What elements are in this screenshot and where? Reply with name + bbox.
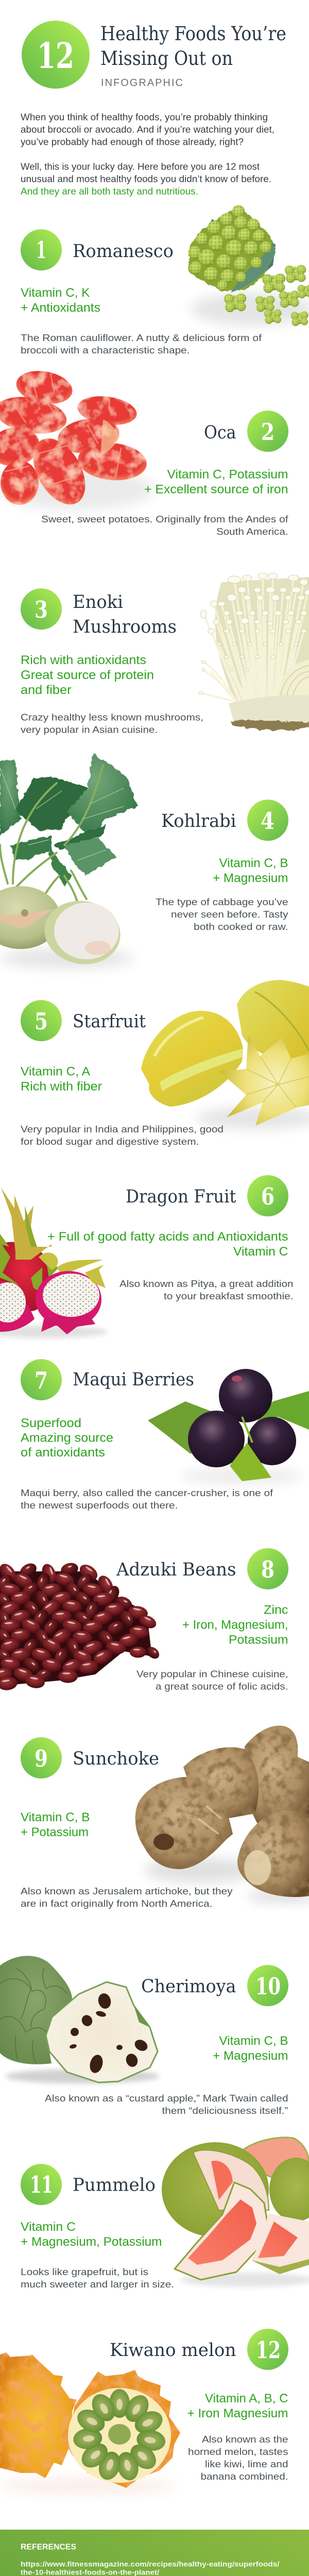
panel: Adzuki Beans <box>0 1548 288 1692</box>
description: Looks like grapefruit, but is <box>21 2267 148 2277</box>
photo: dragon fruit <box>0 1188 108 1338</box>
number badge: 10 <box>255 1973 281 2000</box>
description: the newest superfoods out there. <box>21 1500 178 1511</box>
intro text: you’ve probably had enough of those already, right? <box>21 137 244 147</box>
description <box>41 514 289 537</box>
description: to your breakfast smoothie. <box>164 1291 294 1301</box>
header <box>21 21 286 197</box>
description: banana combined. <box>201 2471 288 2482</box>
photo: oca tubers <box>0 367 154 514</box>
description: Very popular in Chinese cuisine, <box>136 1669 288 1680</box>
nutrients: Vitamin C, K <box>21 286 90 300</box>
nutrients: Rich with fiber <box>21 1080 102 1093</box>
number badge <box>21 229 62 270</box>
nutrients: Amazing source <box>21 1431 113 1445</box>
nutrients: Vitamin C, A <box>21 1064 90 1079</box>
nutrients: Vitamin A, B, C <box>205 2392 288 2405</box>
photo: kiwano melon <box>0 2352 180 2494</box>
number badge: 9 <box>35 1745 48 1772</box>
number badge <box>247 1175 288 1216</box>
heading: Starfruit <box>73 1011 146 1032</box>
panel: Kiwano melon <box>0 2329 288 2494</box>
number badge: 11 <box>30 2171 53 2198</box>
number badge: 2 <box>261 418 274 446</box>
panel: Sunchoke <box>21 1725 309 1909</box>
description: like kiwi, lime and <box>205 2459 288 2469</box>
title: Healthy Foods You’re <box>100 23 286 45</box>
intro text: And they are all both tasty and nutritious. <box>21 187 198 197</box>
nutrients: Rich with antioxidants <box>21 653 146 667</box>
nutrients: Vitamin C, Potassium <box>167 468 288 481</box>
description: are in fact originally from North America. <box>21 1899 212 1909</box>
nutrients: Vitamin C, B <box>219 2034 288 2048</box>
nutrients <box>213 856 288 885</box>
description <box>45 2093 288 2116</box>
description: horned melon, tastes <box>188 2447 288 2457</box>
photo: romanesco <box>188 205 309 326</box>
nutrients: and fiber <box>21 683 71 697</box>
heading: Mushrooms <box>73 617 177 637</box>
number badge <box>247 1548 288 1589</box>
description <box>21 712 203 735</box>
number badge <box>21 588 62 630</box>
intro text: unusual and most healthy foods you didn’t know of before. <box>21 174 271 184</box>
description: Very popular in India and Philippines, good <box>21 1124 224 1134</box>
heading: Dragon Fruit <box>126 1187 236 1207</box>
heading: Kiwano melon <box>110 2340 236 2361</box>
nutrients <box>213 2034 288 2063</box>
nutrients <box>21 1064 102 1093</box>
nutrients <box>182 1603 288 1647</box>
photo: adzuki beans <box>0 1561 162 1691</box>
nutrients: Vitamin C, B <box>219 856 288 870</box>
number badge: 8 <box>261 1556 274 1583</box>
description <box>21 1488 273 1511</box>
number badge <box>15 1350 67 1400</box>
nutrients: + Magnesium, Potassium <box>21 2235 162 2249</box>
nutrients: + Iron Magnesium <box>187 2406 288 2420</box>
number badge <box>21 2164 62 2205</box>
nutrients <box>144 468 288 497</box>
description: Also known as Pitya, a great addition <box>119 1279 294 1289</box>
description: South America. <box>216 527 288 537</box>
references heading: REFERENCES <box>21 2543 76 2551</box>
description: for blood sugar and digestive system. <box>21 1137 199 1147</box>
nutrients <box>21 1810 90 1839</box>
number badge: 12 <box>256 2336 281 2364</box>
panel: Romanesco <box>21 205 309 355</box>
number badge <box>21 1737 62 1778</box>
photo: enoki mushrooms <box>199 573 309 731</box>
heading: Cherimoya <box>141 1976 236 1997</box>
nutrients: Great source of protein <box>21 668 154 682</box>
heading: Pummelo <box>73 2175 156 2196</box>
nutrients <box>21 653 154 697</box>
number badge: 5 <box>35 1008 48 1035</box>
nutrients <box>187 2392 288 2420</box>
description: a great source of folic acids. <box>156 1682 288 1692</box>
heading: Sunchoke <box>73 1749 159 1769</box>
nutrients: + Magnesium <box>213 2049 288 2063</box>
panel: Cherimoya <box>0 1956 288 2116</box>
panel: Enoki Mushrooms <box>21 573 309 735</box>
description <box>156 897 288 932</box>
nutrients: + Antioxidants <box>21 301 100 315</box>
heading: Romanesco <box>73 241 174 262</box>
photo: maqui berries <box>148 1369 309 1484</box>
nutrients <box>21 1416 113 1460</box>
description: Sweet, sweet potatoes. Originally from the Andes of <box>41 514 289 524</box>
heading: Oca <box>204 422 236 443</box>
intro text: Well, this is your lucky day. Here before you are 12 most <box>21 162 260 172</box>
references list <box>21 2561 285 2576</box>
description: Also known as a “custard apple,” Mark Twain called <box>45 2093 288 2104</box>
heading: Adzuki Beans <box>116 1560 236 1580</box>
number badge <box>247 411 288 452</box>
description <box>21 2267 174 2290</box>
nutrients <box>47 1230 288 1259</box>
nutrients: + Iron, Magnesium, <box>182 1618 288 1632</box>
nutrients: Vitamin C <box>233 1245 288 1259</box>
description <box>21 333 262 355</box>
nutrients: Vitamin C <box>21 2220 76 2234</box>
panel: Starfruit <box>21 980 309 1147</box>
description: broccoli with a characteristic shape. <box>21 345 190 355</box>
panel: Dragon Fruit <box>0 1175 294 1338</box>
panel: Pummelo <box>21 2138 309 2290</box>
description <box>119 1279 294 1301</box>
intro text <box>21 112 274 197</box>
description: The Roman cauliflower. A nutty & delicious form of <box>21 333 262 343</box>
title <box>100 23 286 70</box>
number badge: 1 <box>36 236 46 264</box>
description: Crazy healthy less known mushrooms, <box>21 712 203 722</box>
nutrients: + Potassium <box>21 1825 89 1839</box>
nutrients: Vitamin C, B <box>21 1810 90 1824</box>
panel: Kohlrabi <box>0 753 288 970</box>
nutrients: Superfood <box>21 1416 81 1430</box>
intro text: When you think of healthy foods, you’re probably thinking <box>21 112 268 123</box>
nutrients: + Full of good fatty acids and Antioxidants <box>47 1230 288 1244</box>
nutrients: Potassium <box>229 1633 288 1647</box>
description: both cooked or raw. <box>194 922 288 932</box>
number badge <box>247 1965 288 2006</box>
description: them “deliciousness itself.” <box>162 2106 288 2116</box>
heading: Kohlrabi <box>161 811 236 832</box>
description: The type of cabbage you’ve <box>156 897 288 907</box>
big badge: 12 <box>22 21 90 89</box>
description <box>136 1669 288 1692</box>
photo: pummelo <box>162 2138 309 2287</box>
nutrients: + Excellent source of iron <box>144 482 288 497</box>
number badge <box>21 1000 62 1041</box>
description: Also known as Jerusalem artichoke, but they <box>21 1886 233 1896</box>
description: Also known as the <box>202 2434 288 2445</box>
number badge <box>247 2329 288 2370</box>
panel: references <box>0 2530 309 2576</box>
description: very popular in Asian cuisine. <box>21 724 158 735</box>
panel: Oca <box>0 367 289 537</box>
description: Maqui berry, also called the cancer-crusher, is one of <box>21 1488 273 1498</box>
heading: Enoki <box>73 592 123 613</box>
nutrients: Zinc <box>264 1603 288 1617</box>
photo: sunchoke <box>135 1725 309 1903</box>
photo: starfruit <box>141 980 309 1129</box>
number badge: 4 <box>261 807 274 835</box>
panel: Maqui Berries <box>15 1350 309 1511</box>
heading <box>73 592 177 637</box>
photo: kohlrabi <box>0 753 138 970</box>
nutrients: of antioxidants <box>21 1446 105 1460</box>
nutrients: + Magnesium <box>213 871 288 885</box>
description <box>21 1124 224 1147</box>
description: never seen before. Tasty <box>171 909 288 920</box>
big badge: 12: 12 <box>37 36 74 77</box>
description: much sweeter and larger in size. <box>21 2279 174 2290</box>
title: Missing Out on <box>100 47 233 70</box>
nutrients <box>21 2220 162 2249</box>
references list: https://www.fitnessmagazine.com/recipes/healthy-eating/superfoods/ <box>21 2561 280 2568</box>
description <box>21 1886 233 1909</box>
intro text: about broccoli or avocado. And if you’re watching your diet, <box>21 125 274 135</box>
heading: Maqui Berries <box>73 1369 194 1390</box>
number badge: 6 <box>261 1183 274 1210</box>
number badge <box>247 800 288 841</box>
number badge: 7 <box>35 1367 48 1394</box>
subtitle: INFOGRAPHIC <box>101 77 183 89</box>
nutrients <box>21 286 100 315</box>
photo: cherimoya <box>0 1956 160 2083</box>
number badge: 3 <box>35 596 48 623</box>
description <box>188 2434 288 2482</box>
